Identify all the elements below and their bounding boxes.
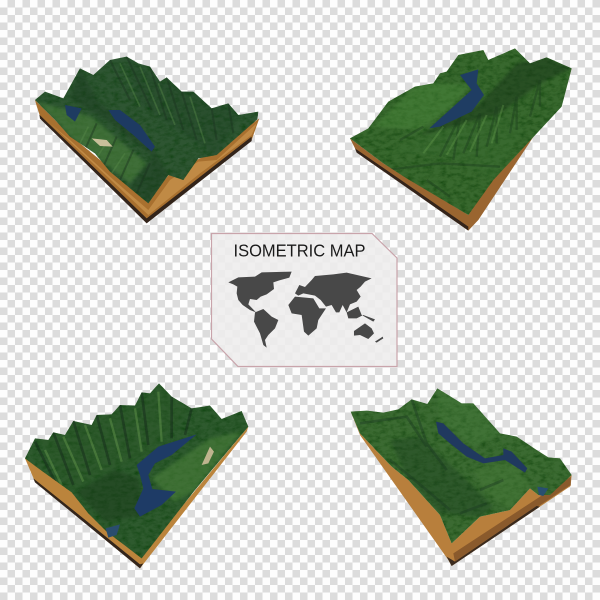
terrain surface [25, 383, 248, 558]
lake: main [134, 434, 197, 517]
map block: top right [350, 48, 572, 231]
terrain surface [351, 388, 572, 543]
Australia [354, 323, 374, 339]
lake [429, 69, 484, 128]
map block: top left [35, 57, 259, 223]
soil side walls [35, 100, 259, 223]
Southeast Asia islands [347, 307, 375, 322]
ridge shading [360, 388, 530, 517]
Eurasia [295, 273, 372, 312]
Africa [288, 297, 326, 336]
card panel [212, 234, 397, 366]
world map [228, 272, 383, 348]
lake: small [65, 105, 82, 122]
lake: small [106, 524, 120, 538]
soil side walls [351, 412, 572, 566]
lake: corner [537, 487, 548, 496]
soil side walls [350, 68, 572, 231]
terrain surface [350, 48, 572, 215]
ridge shading [373, 57, 572, 197]
ridge shading [35, 383, 242, 522]
New Zealand [375, 337, 383, 343]
South America [254, 309, 278, 348]
pale clearings [202, 447, 214, 465]
map block: bottom right [351, 388, 572, 566]
ridge shading [37, 57, 238, 203]
info card [212, 234, 397, 366]
North America [228, 272, 292, 312]
map block: bottom left [25, 383, 248, 568]
terrain surface [35, 57, 258, 203]
pale clearing [92, 138, 113, 147]
lake: long [436, 422, 527, 473]
title: ISOMETRIC MAP [234, 240, 366, 260]
lake: long [108, 110, 155, 152]
soil side walls [25, 427, 248, 568]
